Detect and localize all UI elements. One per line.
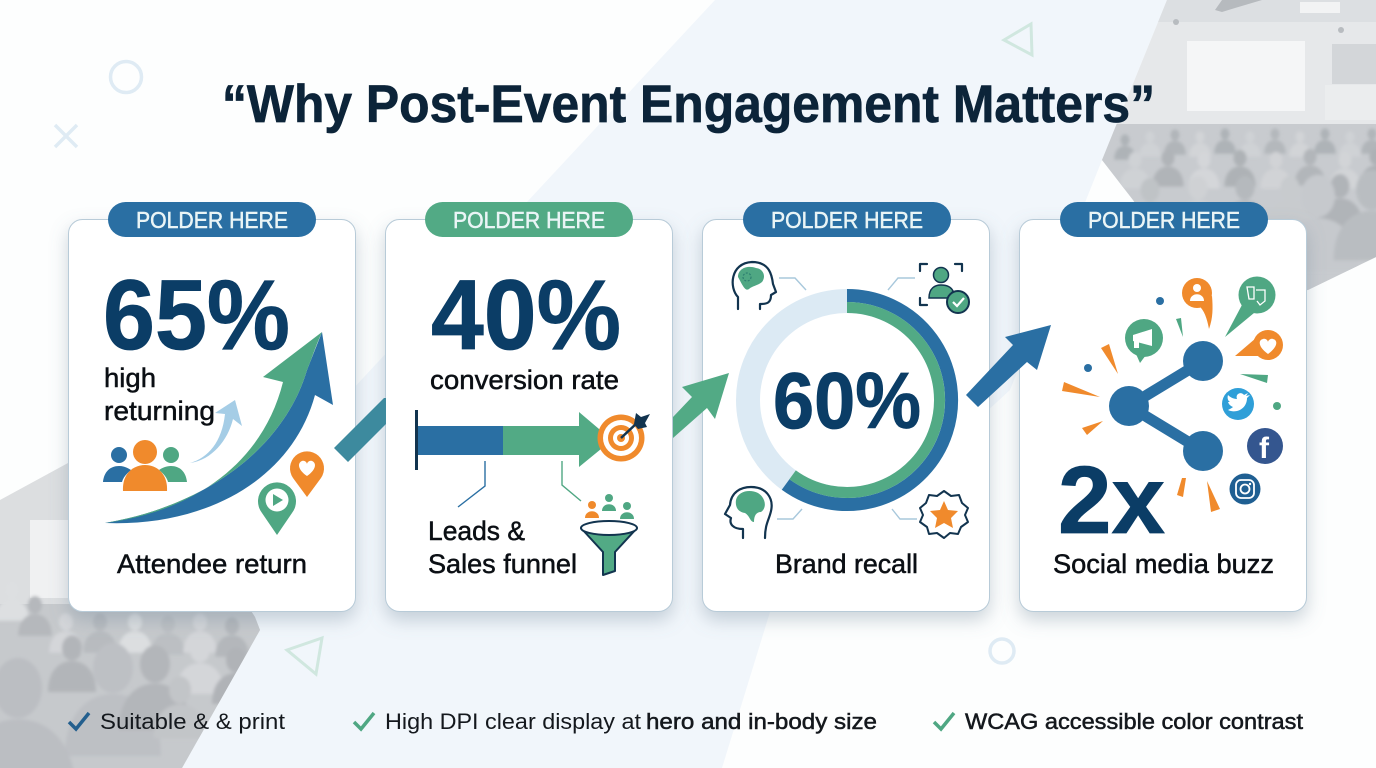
stat label: returning (104, 396, 215, 426)
leader lines (458, 461, 581, 507)
big growth arrow (105, 332, 333, 523)
caption: Social media buzz (1053, 549, 1274, 579)
icon: play pin (258, 482, 296, 535)
progress arrow bar (415, 410, 612, 470)
donut chart 60% (748, 295, 952, 504)
footer item: WCAG: WCAG accessible color contrast (965, 709, 1303, 734)
stat label: conversion rate (430, 365, 619, 395)
footer item: high DPI: hero and in-body size (646, 709, 877, 734)
icon: person bubble (1182, 278, 1213, 329)
badge (425, 202, 633, 237)
icon: heart pin (290, 451, 324, 497)
stat 40%: 40% (431, 259, 621, 370)
icon: twitter (1222, 388, 1254, 420)
icon: person recognized (920, 264, 969, 313)
icon: target with dart (598, 413, 650, 462)
panel: social media buzz (1020, 202, 1306, 612)
icon: attendees (103, 440, 187, 491)
icon: small light arrow (190, 400, 242, 463)
icon: facebook (1247, 428, 1283, 465)
icon: head with brain top left (733, 262, 776, 309)
badge (1060, 202, 1268, 237)
decoration: cross left (55, 125, 77, 147)
icon: instagram (1230, 474, 1260, 504)
badge: POLDER HERE (1088, 207, 1240, 233)
footer item: high DPI: High DPI clear display at (385, 709, 641, 734)
panel: brand recall (702, 202, 990, 612)
stat 60%: 60% (773, 356, 921, 445)
stat 65%: 65% (103, 259, 290, 370)
caption: Attendee return (117, 549, 307, 579)
icon: megaphone bubble (1125, 319, 1163, 363)
panel: attendee return (68, 202, 356, 612)
caption (428, 516, 577, 579)
footer item: suitable: Suitable & & print (100, 709, 285, 734)
stat label: high (104, 363, 156, 393)
decoration: circle bottom (990, 639, 1014, 663)
icon: star badge (920, 491, 968, 538)
stat label (104, 363, 215, 426)
decoration: circle top left (110, 62, 142, 92)
title: “Why Post-Event Engagement Matters” (222, 75, 1155, 134)
icon: share network (1109, 341, 1223, 471)
icon: funnel with people (581, 494, 637, 575)
icon: burst shards (1062, 297, 1281, 512)
icon: facebook: f (1259, 432, 1270, 465)
panel: conversion rate (386, 202, 672, 612)
decoration: triangle top (1004, 24, 1032, 55)
badge: POLDER HERE (453, 207, 605, 233)
badge: POLDER HERE (136, 207, 288, 233)
icon: chat bubble (1225, 276, 1276, 337)
arrow: card 1 to card 2 (334, 398, 386, 462)
badge (108, 202, 316, 237)
arrow: card 2 to card 3 (673, 373, 729, 438)
stat 2x: 2x (1058, 447, 1165, 554)
leader lines (777, 278, 917, 519)
caption: Brand recall (775, 549, 918, 579)
badge: POLDER HERE (771, 207, 923, 233)
icon: heart bubble (1235, 330, 1283, 360)
caption: Leads & (428, 516, 525, 546)
arrow: card 3 to card 4 (966, 325, 1051, 407)
footer item: high DPI (354, 709, 877, 734)
icon: head with brain bottom left (725, 487, 772, 538)
decoration: triangle bottom (287, 638, 322, 674)
badge (743, 202, 951, 237)
caption: Sales funnel (428, 549, 577, 579)
background photo: conference room bottom left (0, 463, 260, 768)
background photo: conference room top right (1100, 0, 1376, 304)
